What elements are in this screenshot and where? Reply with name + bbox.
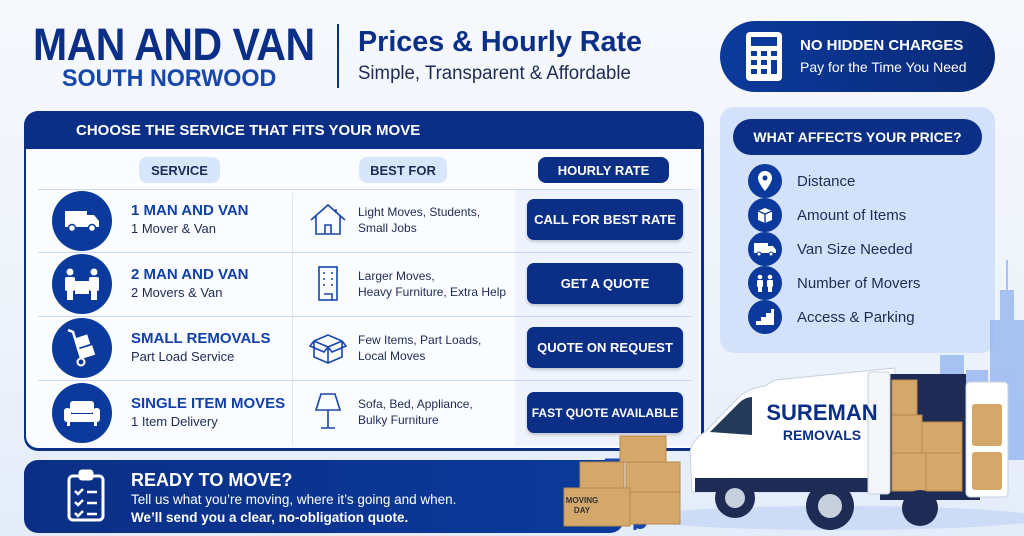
icon: box — [308, 334, 348, 364]
text: Distance — [797, 173, 855, 190]
column header: service — [139, 157, 220, 183]
text: FAST QUOTE AVAILABLE — [532, 406, 678, 420]
panel heading: CHOOSE THE SERVICE THAT FITS YOUR MOVE — [76, 122, 420, 139]
text: Larger Moves, — [358, 269, 435, 283]
subtitle: SOUTH NORWOOD: SOUTH NORWOOD — [62, 65, 276, 92]
text: Heavy Furniture, Extra Help — [358, 285, 506, 299]
text: Light Moves, Students, — [358, 205, 480, 219]
row 3: small removals — [52, 318, 112, 378]
badge: no hidden charges — [720, 21, 995, 92]
text: 1 Item Delivery — [131, 414, 218, 429]
text: CALL FOR BEST RATE — [534, 212, 676, 227]
factor: van size — [748, 232, 782, 266]
city skyline — [940, 260, 1024, 460]
factor: access — [748, 300, 782, 334]
icon: calculator — [746, 32, 782, 81]
text: SMALL REMOVALS — [131, 330, 270, 347]
illustration: van with boxes: REMOVALS — [783, 427, 861, 443]
text: 2 MAN AND VAN — [131, 266, 249, 283]
column header: service: SERVICE — [151, 162, 208, 178]
banner: ready to move: We’ll send you a clear, no-obligation quote. — [131, 510, 408, 525]
text: Small Jobs — [358, 221, 417, 235]
open right door — [966, 382, 1008, 497]
text: Amount of Items — [797, 207, 906, 224]
illustration: van with boxes: SUREMAN — [766, 400, 878, 425]
column header: best for: BEST FOR — [370, 162, 436, 178]
boxes and trolley — [605, 460, 635, 530]
heading: Prices & Hourly Rate: Prices & Hourly Rate — [358, 26, 642, 58]
illustration: van with boxes — [564, 368, 1024, 530]
panel: what affects your price — [720, 107, 995, 353]
text: Sofa, Bed, Appliance, — [358, 397, 473, 411]
badge: no hidden charges: NO HIDDEN CHARGES — [800, 37, 963, 54]
banner: ready to move: READY TO MOVE? — [131, 470, 292, 490]
title: MAN AND VAN: MAN AND VAN — [33, 19, 315, 70]
wheels — [715, 478, 755, 518]
subheading: Simple, Transparent & Affordable — [358, 63, 631, 84]
row 1: 1 man and van — [52, 191, 112, 251]
illustration: van with boxes: DAY — [574, 506, 591, 515]
text: Local Moves — [358, 349, 425, 363]
panel: service table — [24, 111, 704, 451]
icon: house — [310, 204, 346, 235]
factor: amount of items — [748, 198, 782, 232]
icon: clipboard — [68, 470, 104, 522]
text: GET A QUOTE — [561, 276, 649, 291]
row 2: 2 man and van — [52, 254, 112, 314]
text: Bulky Furniture — [358, 413, 439, 427]
badge: no hidden charges: Pay for the Time You Need — [800, 59, 967, 75]
icon: building — [318, 266, 338, 301]
factor: distance — [748, 164, 782, 198]
text: QUOTE ON REQUEST — [537, 340, 673, 355]
text: Van Size Needed — [797, 241, 913, 258]
column header: hourly rate: HOURLY RATE — [558, 162, 649, 178]
banner: ready to move: Tell us what you’re moving, where it’s going and when. — [131, 492, 456, 507]
banner: ready to move — [24, 460, 624, 533]
icon: lamp — [314, 393, 342, 429]
heading pill — [733, 119, 982, 155]
cargo area — [890, 374, 966, 494]
text: SINGLE ITEM MOVES — [131, 395, 285, 412]
text: 1 MAN AND VAN — [131, 202, 249, 219]
text: Few Items, Part Loads, — [358, 333, 481, 347]
illustration: van with boxes: MOVING — [566, 496, 598, 505]
column header: best for — [359, 157, 447, 183]
text: Access & Parking — [797, 309, 915, 326]
row 4: single item moves — [52, 383, 112, 443]
row dividers — [38, 189, 692, 190]
column header: hourly rate — [538, 157, 669, 183]
heading pill: WHAT AFFECTS YOUR PRICE? — [753, 129, 962, 145]
text: Part Load Service — [131, 349, 234, 364]
text: 1 Mover & Van — [131, 221, 216, 236]
text: 2 Movers & Van — [131, 285, 223, 300]
factor: movers — [748, 266, 782, 300]
text: Number of Movers — [797, 275, 920, 292]
van body — [690, 368, 895, 492]
